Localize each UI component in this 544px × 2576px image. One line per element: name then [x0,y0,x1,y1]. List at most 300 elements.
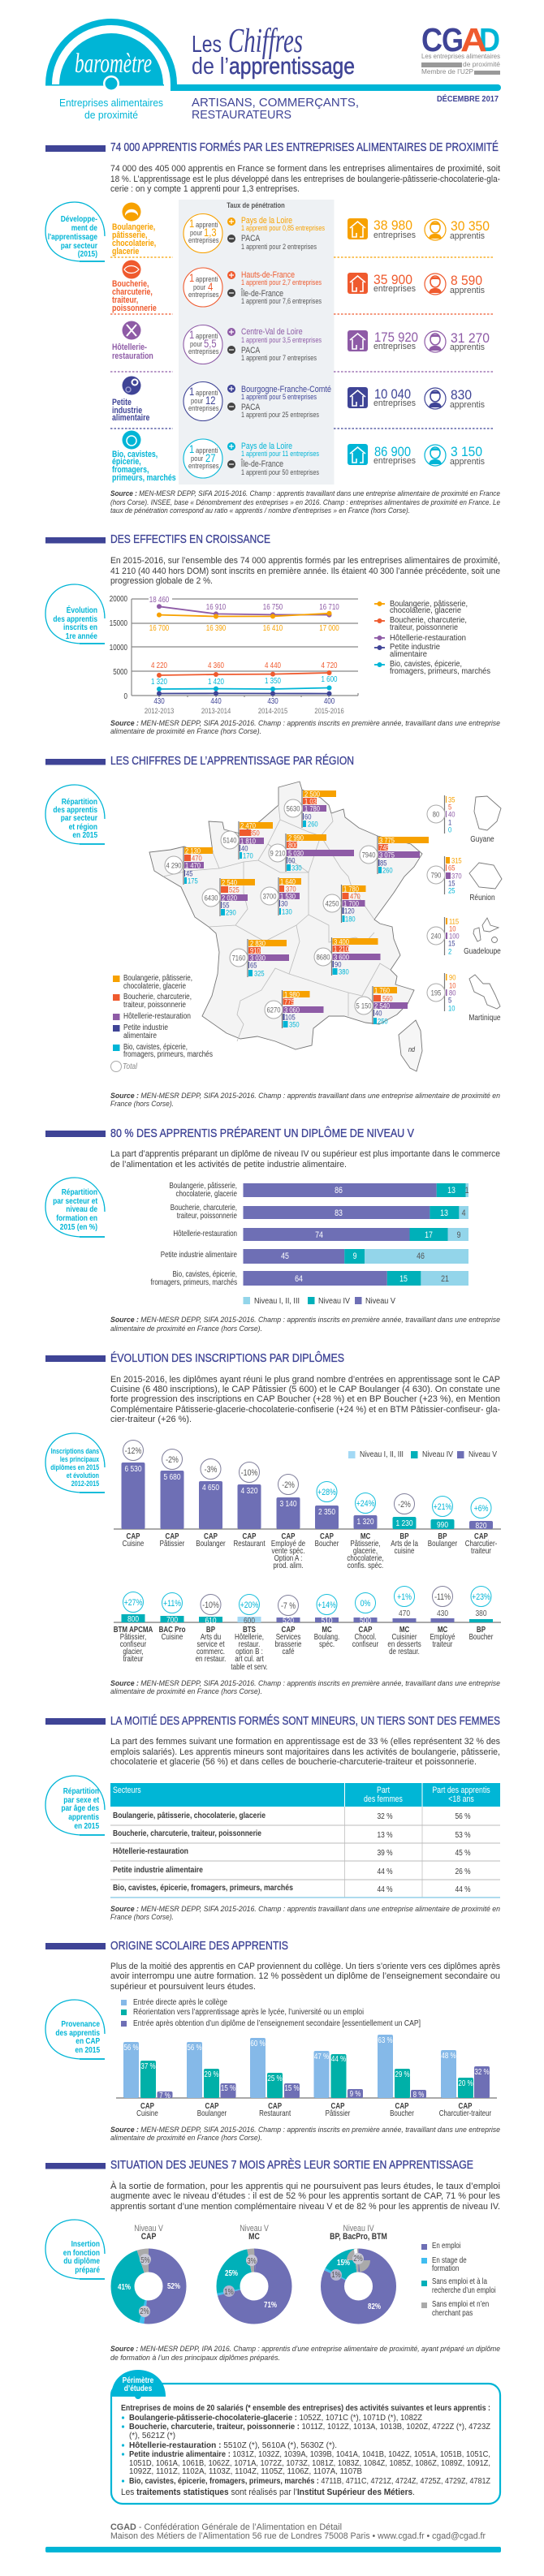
bar: BTM APCMA: Pâtissier, [120,1632,146,1641]
sector label: traiteur, [112,295,138,305]
region: Bretagne: 1 470 [185,861,201,870]
callout: répartition: Répartition [62,797,97,807]
region: Occitanie: 350 [289,1020,300,1029]
icon: entreprises [348,218,368,239]
region: Pays de la Loire: 2 020 [222,894,237,902]
title: de l’ [192,54,229,80]
chart legend: Niveau V [468,1450,497,1459]
region: Auvergne-Rhône-Alpes: 8680 [317,953,330,962]
region: Nouvelle-Aquitaine: 910 [250,946,261,955]
date: DÉCEMBRE 2017 [437,93,499,104]
group: CAP Cuisine: 37 % [140,2061,156,2070]
footer address: CGAD - Confédération Générale de l’Alimentation en Détail [110,2522,342,2532]
bar: BP Boulanger [428,1497,457,1548]
table rows: 13 % [377,1830,393,1840]
year labels: 2013-2014 [201,706,231,715]
group: CAP Charcutier-traiteur: 48 % [441,2051,456,2060]
callout: provenance [45,2000,105,2059]
region: Grand Est: 745 [379,843,390,852]
bar: BP Arts du service: Arts du [201,1632,221,1641]
region: Normandie: 5140 [223,836,237,845]
bar: MC Employé: MC [438,1625,448,1634]
ratio circle: entreprises [188,461,219,470]
table rows: 26 % [455,1867,471,1876]
line chart legend: traiteur, poissonnerie [390,623,458,632]
bar: MC Cuisinier: 470 [399,1609,410,1618]
series: hôtellerie: 16 710 [319,602,339,611]
section 7: origine scolaire [45,1939,500,2142]
axis labels: 15000 [110,618,127,627]
best and worst regions: 1 apprenti pour 11 entreprises [241,450,319,458]
bar: CAP Cuisine: CAP [127,1531,140,1540]
section 6: mineurs et femmes [45,1714,500,1921]
subtitle: entreprises alimentaires: Entreprises alimentaires [59,97,163,109]
chart legend: Niveau IV [422,1450,453,1459]
region: Île-de-France: 2 990 [288,834,304,842]
line chart legend: Boucherie, charcuterie, [390,616,467,625]
stat: entreprises: entreprises [373,456,416,466]
line chart [110,594,358,715]
bar: boucherie [171,1203,468,1220]
donut: BP, BacPro, BTM [330,2224,387,2312]
bar: BTS Hôtellerie [231,1594,268,1671]
icon: apprentis [425,274,446,295]
best and worst regions: Centre-Val de Loire [241,327,303,337]
region: Pays de la Loire: 2 540 [222,878,237,887]
bar: CAP Chocol. [352,1592,378,1648]
region: Hauts-de-France: 60 [304,812,312,821]
series: bio: 1 420 [208,677,224,686]
donut: CAP [118,2224,180,2317]
ratio circle [183,214,222,253]
bar: BTS Hôtellerie: option B : [235,1647,263,1656]
stat: apprentis [450,331,490,352]
sector label: Hôtellerie- [112,342,147,352]
source: Source : MEN-MESR DEPP, SIFA 2015-2016. Champ : apprentis inscrits en première année, travaillant dans une entreprise [110,2126,500,2134]
sector label: Bio, cavistes, [112,450,158,459]
series: petite industrie: 440 [210,696,222,705]
bar: MC Pâtisserie: confis. spéc. [348,1561,383,1570]
bar: CAP Boucher: 2 350 [318,1507,335,1517]
bar: boulangerie: Boulangerie, pâtisserie, [169,1181,237,1190]
bar: CAP Services [275,1596,301,1656]
row: boucherie [112,260,485,313]
ratio circle: pour [191,396,203,405]
region: Centre-Val de Loire: 130 [282,907,292,916]
bar: petite industrie: 46 [417,1251,425,1261]
bar: boucherie: 83 [335,1208,343,1218]
group: CAP Restaurant: 25 % [267,2074,283,2083]
bar: CAP Services: -7 % [281,1601,296,1611]
region: Martinique: 10 [449,981,456,990]
source: Source : MEN-MESR DEPP, SIFA 2015-2016. Champ : apprentis inscrits en première année, travaillant dans une entreprise [110,719,500,727]
best and worst regions: 1 apprenti pour 7,6 entreprises [241,297,322,305]
bar: MC Employé: -11% [434,1592,451,1602]
sector label: primeurs, marchés [112,473,176,483]
region: Réunion: 15 [448,879,455,888]
callout: développement: l'apprentissage [48,232,97,242]
region: Bretagne: 175 [188,877,198,885]
best and worst regions: Île-de-France [240,459,283,469]
callout: inscriptions [45,1433,105,1493]
bar: MC Cuisinier: MC [399,1625,410,1634]
bar: BTS Hôtellerie: +20% [240,1600,259,1610]
region: Bourgogne-Franche-Comté: 4250 [326,899,339,908]
bar: MC Pâtisserie: Pâtisserie, [350,1539,381,1548]
ratio circle: 1 [189,329,194,341]
intro text: La part d’apprentis préparant un diplôme de niveau IV ou supérieur est plus importante dans le commerce [110,1149,500,1159]
sector label: glacerie [112,247,140,256]
sector label [112,398,150,423]
bar: MC Cuisinier [387,1586,421,1656]
stat: entreprises [373,445,416,466]
scope text: 1092Z, 1101Z, 1102A, 1103Z, 1104Z, 1105Z, 1106Z, 1107A, 1107B [129,2467,362,2476]
footer address [110,2522,486,2541]
donut legend: En stage de [432,2255,467,2264]
line chart legend: alimentaire [390,650,427,659]
ratio circle: pour [193,282,205,291]
stat: entreprises [373,218,416,240]
table rows: 56 % [455,1811,471,1821]
region: Réunion: 25 [448,886,455,895]
region: Bretagne: 470 [192,854,202,863]
group: CAP Pâtissier: 47 % [314,2052,329,2061]
bar: CAP Restaurant: Restaurant [233,1539,266,1548]
stat: entreprises [373,273,416,294]
series: hôtellerie: 16 910 [206,602,226,611]
region: PACA: 5 150 [356,1002,372,1010]
group: CAP Pâtissier: CAP [331,2101,344,2110]
chart legend [348,1450,497,1459]
bar: BTM APCMA: confiseur [120,1639,146,1648]
bar: BTS Hôtellerie: BTS [243,1625,256,1634]
callout: inscriptions: 2012-2015 [71,1480,100,1488]
donut: CAP: 41% [118,2282,131,2291]
ratio circle: 12 [205,394,215,407]
region: Nouvelle-Aquitaine: 3 030 [250,954,266,963]
bar: CAP Charcutier: CAP [474,1531,488,1540]
source: alimentaire de proximité en France (hors Corse). [110,1325,262,1333]
group: CAP Cuisine: 56 % [123,2043,139,2052]
group: CAP Restaurant: CAP [268,2101,282,2110]
ratio circle: 1 [189,443,194,455]
map legend: Bio, cavistes, épicerie, [123,1043,188,1052]
region: Guadeloupe: 2 [448,947,451,956]
region: Réunion: 370 [451,872,462,881]
chart legend [121,1998,421,2028]
scope text: Petite industrie alimentaire : 1031Z, 1032Z, 1039A, 1039B, 1041A, 1041B, 1042Z, 1051A, 1051B, 1051C, [129,2450,490,2459]
map legend: Hôtellerie-restauration [123,1012,191,1021]
subtitle: artisans: RESTAURATEURS [192,108,291,122]
bar: MC Boulang.: Boulang. [314,1632,339,1641]
row: hôtellerie [112,321,490,364]
region: Bourgogne-Franche-Comté: 1 780 [343,885,359,894]
series: boucherie [151,661,338,678]
map legend [110,974,213,1071]
scope text: Boucherie, charcuterie, traiteur, poissonnerie : 1011Z, 1012Z, 1013A, 1013B, 1020Z, 4722Z (*), 4723Z [129,2423,490,2432]
panel title: Taux de pénétration [227,200,285,209]
stat: apprentis [450,388,485,410]
bar: BTM APCMA [114,1592,153,1663]
sector label: Boucherie, [112,279,149,289]
series: boulangerie [149,611,339,632]
stat: apprentis: apprentis [450,457,485,467]
series: boulangerie: 16 700 [149,623,169,632]
donut: MC: 71% [264,2300,277,2309]
bar: MC Pâtisserie: chocolaterie, [347,1553,384,1562]
intro text: Plus de la moitié des apprentis en CAP proviennent du collège. Un tiers s’oriente vers ces diplômes après [110,1962,500,1971]
group: CAP Boulanger [187,2042,235,2117]
map of France [149,782,422,1071]
best and worst regions: Pays de la Loire [241,216,292,226]
region: Auvergne-Rhône-Alpes [314,937,380,976]
bar: CAP Pâtissier: -2% [166,1455,179,1465]
logo: CGAD [421,21,500,75]
donut: BP, BacPro, BTM: 15% [337,2258,350,2267]
region: Guadeloupe: 240 [431,932,442,941]
bar: CAP Boucher: +28% [317,1488,336,1497]
series: bio [151,674,338,691]
sector label [112,342,153,361]
bar: CAP Chocol.: 0% [361,1599,371,1609]
region: Pays de la Loire: 525 [229,885,240,894]
callout: provenance: Provenance [61,2019,100,2029]
donut: MC [223,2224,280,2312]
source: Source : MEN-MESR DEPP, SIFA 2015-2016. Champ : apprentis travaillant dans une entreprise alimentaire de proximité en [110,1905,500,1913]
bar: CAP Pâtissier: CAP [166,1531,179,1540]
group: CAP Boulanger: 15 % [221,2083,235,2092]
bar: boulangerie: 13 [447,1186,455,1195]
ratio circle: entreprises [188,290,219,299]
series: petite industrie: 430 [153,696,165,705]
sector label [112,222,156,256]
bar: petite industrie: 45 [281,1251,289,1261]
callout: sexe et âge: par sexe et [63,1795,100,1805]
stat: apprentis [450,274,485,295]
stat: entreprises [373,330,418,351]
donut legend: Sans emploi et n’en [432,2299,489,2308]
scope text: 1051D, 1061A, 1061B, 1062Z, 1071A, 1072Z, 1073Z, 1081Z, 1083Z, 1084Z, 1085Z, 1086Z, 1089Z, 1091Z, [129,2459,490,2468]
icon: apprentis [425,388,446,409]
bar: CAP Boulanger: CAP [204,1531,218,1540]
table rows: 44 % [455,1885,471,1894]
bar: MC Cuisinier: en desserts [387,1639,421,1648]
region: Hauts-de-France: 2 500 [304,790,320,799]
source: Source : MEN-MESR DEPP, SIFA 2015-2016. Champ : apprentis inscrits en première année, travaillant dans une entreprise [110,1316,500,1324]
group: CAP Charcutier-traiteur: 32 % [474,2067,490,2076]
bar: CAP Charcutier: +6% [474,1504,489,1514]
donut: CAP: 2% [140,2307,149,2315]
donut: BP, BacPro, BTM: BP, BacPro, BTM [330,2232,387,2242]
group: CAP Boulanger: CAP [205,2101,218,2110]
bar: MC Cuisinier: +1% [397,1592,412,1602]
group: CAP Cuisine: Cuisine [136,2109,158,2117]
series: petite industrie: 400 [324,696,335,705]
callout: inscriptions: les principaux [60,1455,100,1463]
label: Corse: nd [408,1045,415,1053]
stat: apprentis: 8 590 [451,274,482,288]
callout: développement: par secteur [61,241,97,251]
bar: CAP Employé de vente [271,1474,305,1570]
region: Pays de la Loire: 6430 [205,894,218,902]
bar: boulangerie: 86 [335,1186,343,1195]
source: Source : MEN-MESR DEPP, SIFA 2015-2016. Champ : apprentis inscrits en première année, travaillant dans une entreprise [110,1679,500,1687]
sector label: industrie [112,406,143,416]
axis labels: 5000 [113,667,127,676]
bar: CAP Pâtissier: 5 680 [163,1472,181,1482]
region: Auvergne-Rhône-Alpes: 3 400 [334,937,349,946]
table [110,1783,500,1898]
region: PACA: 2 540 [374,1002,390,1010]
bar: MC Employé: traiteur [433,1639,452,1648]
bar chart: bottom row [114,1586,501,1671]
line chart legend: chocolaterie, glacerie [390,606,461,615]
region: Centre-Val de Loire: 1 530 [280,892,296,901]
intro text: Cuisine (6 480 inscriptions), le CAP Pâtissier (5 600) et le CAP Boulanger (4 630). On constate une [110,1385,500,1394]
ratio circle: 1,3 [204,226,217,239]
group: CAP Pâtissier: 44 % [331,2054,346,2063]
table rows: Petite industrie alimentaire [113,1865,203,1875]
ratio circle [183,268,222,307]
bar: boulangerie: 1 [465,1186,469,1195]
region: Bourgogne-Franche-Comté: 1 700 [343,899,359,908]
callout: développement [45,202,105,261]
bar: BTS Hôtellerie: table et serv. [231,1662,268,1671]
bar: BP Boucher: +23% [472,1592,490,1602]
bar: MC Boulang.: MC [322,1625,332,1634]
intro text: 18 %. L’apprentissage est le plus développé dans les entreprises de boulangerie-pâtisserie-chocolaterie-gla- [110,174,500,184]
region: Auvergne-Rhône-Alpes: 380 [339,967,349,976]
section 4: niveau V [45,1126,500,1333]
logo: CGAD: de proximité [463,60,500,68]
ratio circle [183,381,222,420]
stat: entreprises: 38 980 [373,218,412,233]
bar: CAP Cuisine: -12% [125,1446,141,1456]
bar: BP Arts de la cuisine: -2% [398,1500,411,1510]
callout: sexe et âge: Répartition [63,1786,99,1796]
group: CAP Charcutier-traiteur: 20 % [458,2078,473,2087]
donut legend: Sans emploi et à la [432,2277,488,2285]
heading: DES EFFECTIFS EN CROISSANCE [110,532,270,546]
callout: provenance: en CAP [76,2036,101,2046]
region: Guadeloupe: 15 [448,939,455,948]
region: Bretagne: 2 130 [185,846,201,855]
bar: BAC Pro Cuisine: +11% [163,1599,181,1609]
region: Hauts-de-France: 260 [308,820,318,829]
donut: CAP: 52% [167,2281,180,2290]
callout: évolution: 1re année [66,631,97,641]
best and worst regions: PACA [241,346,261,355]
callout: répartition: en 2015 [72,830,98,840]
stat: apprentis: 31 270 [451,331,490,346]
panel: périmètre d'études [111,2370,500,2504]
bar: CAP Restaurant: -10% [241,1468,257,1478]
bar: MC Employé [430,1586,455,1648]
bar: CAP Services: brasserie [275,1639,301,1648]
region: Martinique: 80 [449,989,456,997]
heading bar [45,1355,106,1362]
series: boucherie: 4 720 [321,661,338,670]
series: hôtellerie [149,595,339,618]
source [110,2126,500,2142]
table rows: Boucherie, charcuterie, traiteur, poissonnerie [113,1829,261,1838]
region: Grand Est: 3 775 [379,836,395,845]
stat: apprentis: 3 150 [451,445,482,459]
table rows [113,1811,471,1894]
region: Centre-Val de Loire: 370 [286,885,296,894]
callout: inscriptions: Inscriptions dans [51,1447,100,1455]
chart legend: Niveau I, II, III [360,1450,404,1459]
region: Hauts-de-France [284,790,336,829]
section 3: régions [45,754,502,1108]
table rows: 32 % [377,1811,393,1821]
chart legend: Entrée directe après le collège [133,1998,227,2007]
bar: CAP Chocol.: CAP [359,1625,372,1634]
region: Nouvelle-Aquitaine [230,939,289,978]
callout: sexe et âge: par âge des [61,1803,99,1813]
heading: LES CHIFFRES DE L’APPRENTISSAGE PAR RÉGION [110,754,354,768]
sector label [112,279,157,313]
bar: CAP Boucher: Boucher [315,1539,339,1548]
region: Île-de-France: 5 030 [288,849,304,858]
table rows: Boulangerie, pâtisserie, chocolaterie, glacerie [113,1811,266,1820]
callout: insertion: Insertion [71,2239,100,2249]
callout: sexe et âge: en 2015 [74,1821,100,1831]
bar: CAP Employé de vente: Option A : [274,1553,302,1562]
bar: bio [150,1269,468,1286]
region: Normandie: 1 810 [240,837,256,846]
source [110,719,500,735]
bar: MC Pâtisserie: 1 320 [356,1517,374,1527]
bar: boucherie: 4 [462,1208,466,1218]
bar: BP Boulanger: Boulanger [428,1539,457,1548]
bar: BTS Hôtellerie: restaur. [239,1639,260,1648]
best and worst regions: 1 apprenti pour 3,5 entreprises [241,336,322,344]
scope text: Bio, cavistes, épicerie, fromagers, primeurs, marchés : 4711B, 4711C, 4721Z, 4724Z, 4725Z, 4729Z, 4781Z [129,2477,490,2486]
bar: bio: 15 [399,1274,408,1284]
sector label: poissonnerie [112,304,157,313]
region: PACA: 40 [375,1009,382,1018]
row: petite industrie [112,377,485,423]
source [110,2345,500,2362]
heading bar [45,537,106,544]
callout: répartition: niveau de [66,1204,97,1214]
year labels: 2015-2016 [314,706,344,715]
region: Guadeloupe [427,917,501,956]
icon: basket [122,430,141,450]
year labels [145,706,344,715]
stat: entreprises: 86 900 [374,445,411,459]
callout: insertion [45,2220,105,2279]
subtitle: artisans [192,96,359,122]
bar: petite industrie [161,1249,468,1264]
region: Guyane: 35 [448,795,455,804]
source [110,1092,500,1108]
bar: boulangerie: chocolaterie, glacerie [175,1189,237,1198]
bar: CAP Services: CAP [282,1625,295,1634]
callout: répartition: des apprentis [53,805,97,815]
footer address: Maison des Métiers de l’Alimentation 56 rue de Londres 75008 Paris • www.cgad.fr • cgad@cgad.fr [110,2531,486,2541]
sector label: pâtisserie, [112,230,148,240]
callout: répartition [45,785,105,844]
icon: croissant [122,203,141,221]
bar: MC Employé: Employé [430,1632,455,1641]
stat: apprentis [450,445,485,467]
callout: répartition: et région [69,822,97,832]
region: Île-de-France: 800 [288,841,299,850]
callout: provenance: en 2015 [75,2045,101,2055]
icon: apprentis [425,445,446,466]
